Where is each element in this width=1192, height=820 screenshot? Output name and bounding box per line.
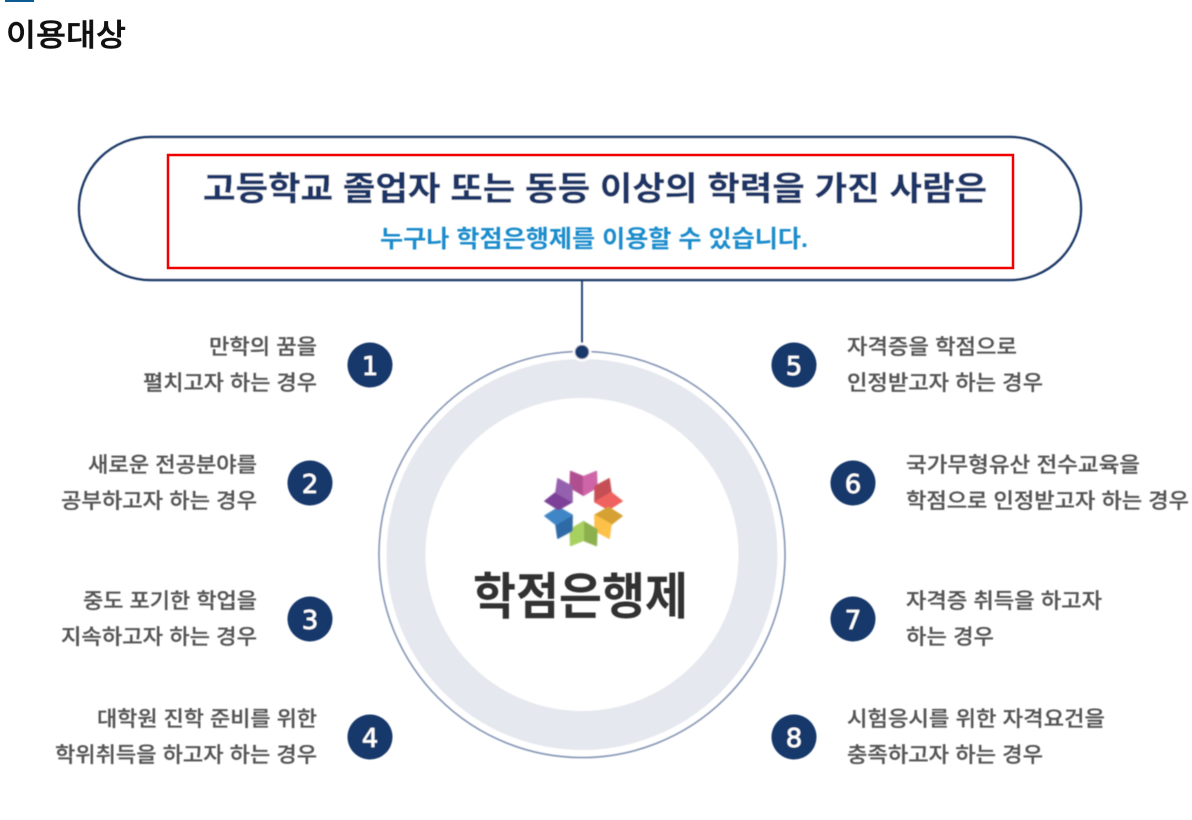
item 5: 인정받고자 하는 경우 (847, 372, 1043, 395)
item 5: 자격증을 학점으로 (847, 336, 1017, 359)
item 8: 시험응시를 위한 자격요건을 (847, 708, 1105, 731)
item 7: 하는 경우 (906, 626, 994, 649)
item 2: 공부하고자 하는 경우 (61, 490, 257, 513)
heading: 이용대상: 이용대상 (6, 18, 126, 53)
item 2: 새로운 전공분야를 (88, 454, 257, 477)
central ring (379, 352, 785, 758)
item 7 (830, 590, 1102, 649)
item 3: 3 (302, 606, 318, 636)
item 4: 대학원 진학 준비를 위한 (97, 708, 317, 731)
item 8: 8 (786, 724, 802, 754)
item 2 (61, 454, 332, 513)
ring top dot (572, 342, 592, 362)
item 7: 자격증 취득을 하고자 (906, 590, 1102, 613)
item 5 (772, 336, 1043, 395)
item 3: 중도 포기한 학업을 (83, 590, 257, 613)
item 6 (830, 454, 1189, 513)
icon: flower logo (545, 471, 622, 546)
item 7: 7 (845, 606, 861, 636)
item 8: 충족하고자 하는 경우 (847, 744, 1043, 767)
panel: eligibility pill (79, 137, 1081, 280)
logo wordmark: 학점은행제 (473, 569, 688, 625)
item 1: 만학의 꿈을 (209, 336, 317, 359)
pill subheading: 누구나 학점은행제를 이용할 수 있습니다. (380, 226, 808, 253)
item 4: 4 (362, 724, 378, 754)
item 3: 지속하고자 하는 경우 (61, 626, 257, 649)
item 3 (61, 590, 332, 649)
pill headline: 고등학교 졸업자 또는 동등 이상의 학력을 가진 사람은 (203, 170, 987, 207)
item 8 (772, 708, 1105, 767)
item 6: 6 (845, 470, 861, 500)
item 6: 국가무형유산 전수교육을 (906, 454, 1140, 477)
heading accent bar (5, 0, 34, 2)
item 2: 2 (302, 470, 318, 500)
item 1 (143, 336, 392, 395)
connector line from pill to ring (581, 280, 583, 348)
item 4: 학위취득을 하고자 하는 경우 (55, 744, 317, 767)
item 5: 5 (786, 352, 802, 382)
item 6: 학점으로 인정받고자 하는 경우 (906, 490, 1189, 513)
item 1: 1 (362, 352, 378, 382)
item 4 (55, 708, 392, 767)
red highlight box (168, 155, 1013, 268)
item 1: 펼치고자 하는 경우 (143, 372, 317, 395)
